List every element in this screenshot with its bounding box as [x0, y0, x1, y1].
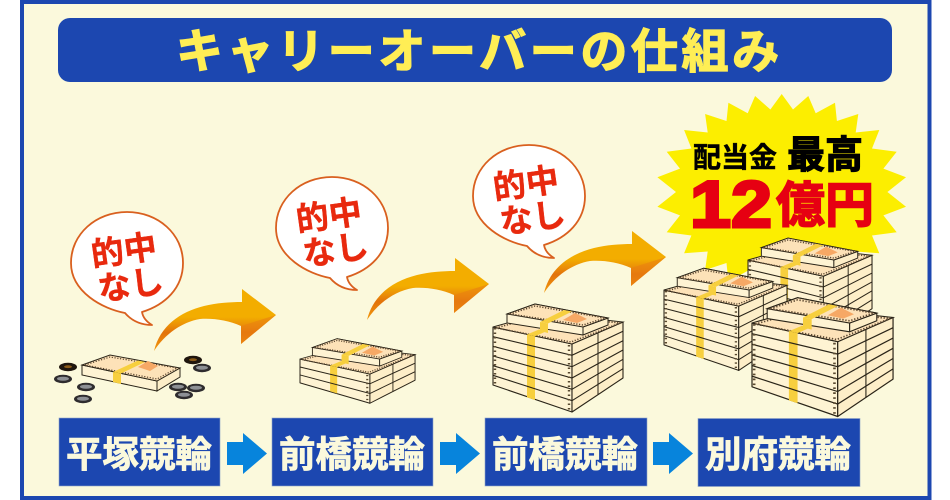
blue arrow 3: [653, 433, 693, 474]
curved arrow 1: [154, 289, 276, 351]
prize text: maximum payout: 配当金: [693, 142, 777, 173]
money: small stack: [300, 339, 415, 403]
label: Maebashi 1: [272, 418, 433, 486]
starburst: prize: [657, 94, 906, 290]
bubble: no winner 3: [473, 145, 585, 258]
label: Maebashi 2: 前橋競輪: [492, 434, 638, 475]
money: medium stack: [493, 304, 623, 412]
prize text: maximum payout: 最高: [787, 135, 863, 177]
label: Maebashi 1: 前橋競輪: [279, 434, 425, 475]
curved arrow 3: [544, 231, 666, 293]
title banner: キャリーオーバーの仕組み: [176, 25, 783, 78]
prize amount: 億円: [776, 179, 874, 233]
label: Hiratsuka: [59, 418, 220, 486]
blue arrow 2: [440, 433, 480, 474]
label: Maebashi 2: [485, 418, 647, 486]
label: Beppu: 別府競輪: [705, 434, 851, 475]
bubble: no winner 1: [71, 212, 183, 325]
money: coins and one bundle: [54, 355, 211, 403]
title banner: [58, 18, 892, 82]
prize text: maximum payout: [693, 135, 863, 177]
curved arrow 2: [367, 258, 489, 320]
label: Hiratsuka: 平塚競輪: [66, 434, 212, 475]
bubble: no winner 2: [276, 177, 388, 290]
prize amount: [690, 167, 874, 241]
blue arrow 1: [227, 433, 267, 474]
money: large pile: [664, 238, 893, 416]
label: Beppu: [698, 418, 860, 486]
prize amount: 12: [690, 167, 772, 241]
